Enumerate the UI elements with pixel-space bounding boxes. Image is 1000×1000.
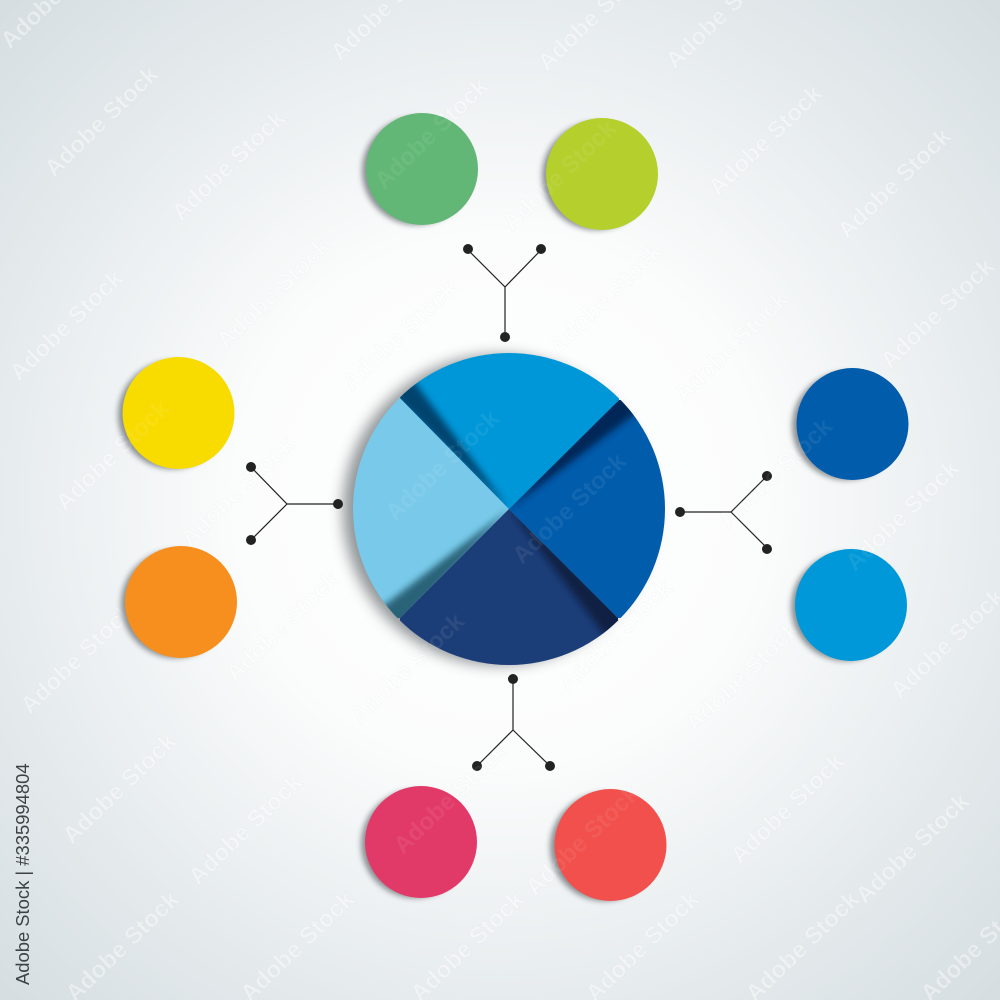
circle: green	[362, 113, 478, 225]
watermark over shapes: Adobe Stock	[369, 73, 494, 194]
fold shadow on right segment	[512, 400, 636, 508]
connector: top	[463, 244, 546, 342]
connector: bottom	[472, 674, 555, 771]
circle: lime	[542, 118, 658, 230]
watermark pattern: Adobe Stock	[220, 566, 345, 687]
connector: right	[675, 471, 772, 554]
watermark pattern: Adobe Stock	[680, 616, 805, 737]
watermark over shapes: Adobe Stock	[345, 608, 470, 729]
watermark over shapes: Adobe Stock	[507, 448, 632, 569]
fold shadow on bottom segment	[512, 514, 618, 636]
segment: right dark blue	[509, 400, 665, 618]
watermark pattern: Adobe Stock	[497, 115, 622, 236]
circle: sky blue	[791, 549, 907, 661]
circle: dark blue	[792, 368, 908, 480]
pie drop shadow	[343, 355, 653, 665]
watermark pattern: Adobe Stock	[337, 275, 462, 396]
watermark pattern: Adobe Stock	[543, 238, 668, 359]
circle: pink	[361, 786, 477, 898]
watermark pattern: Adobe Stock	[211, 233, 336, 354]
fold shadow on left segment	[383, 510, 506, 618]
watermark pattern: Adobe Stock	[39, 61, 164, 182]
watermark pattern: Adobe Stock	[388, 738, 513, 859]
watermark pattern: Adobe Stock	[725, 748, 850, 869]
watermark pattern: Adobe Stock	[175, 431, 300, 552]
segment: bottom navy	[400, 509, 618, 665]
watermark pattern: Adobe Stock	[669, 286, 794, 407]
circle: red	[550, 789, 666, 901]
watermark pattern: Adobe Stock	[713, 413, 838, 534]
watermark pattern: Adobe Stock	[840, 455, 965, 576]
connector: left	[246, 462, 343, 545]
watermark pattern: Adobe Stock	[703, 80, 828, 201]
watermark over shapes: Adobe Stock	[553, 575, 678, 696]
circle: yellow	[118, 357, 234, 469]
watermark over shapes: Adobe Stock	[388, 738, 513, 859]
watermark pattern: Adobe Stock	[183, 769, 308, 890]
segment: left light blue	[353, 398, 509, 618]
central pie circle	[340, 340, 680, 680]
circle: orange	[121, 546, 237, 658]
fold shadow on top segment	[400, 382, 508, 506]
watermark pattern: Adobe Stock	[57, 728, 182, 849]
watermark pattern: Adobe Stock	[875, 253, 1000, 374]
watermark over shapes: Adobe Stock	[520, 780, 645, 901]
watermark pattern: Adobe Stock	[166, 105, 291, 226]
watermark over shapes: Adobe Stock	[840, 455, 965, 576]
watermark over shapes: Adobe Stock	[380, 405, 505, 526]
watermark pattern: Adobe Stock	[850, 788, 975, 909]
watermark over shapes	[50, 73, 965, 901]
watermark over shapes: Adobe Stock	[497, 115, 622, 236]
watermark pattern: Adobe Stock	[4, 265, 129, 386]
watermark pattern: Adobe Stock	[520, 780, 645, 901]
watermark over shapes: Adobe Stock	[713, 413, 838, 534]
watermark pattern: Adobe Stock	[345, 608, 470, 729]
watermark pattern: Adobe Stock	[832, 123, 957, 244]
watermark over shapes: Adobe Stock	[50, 395, 175, 516]
segment: top blue	[400, 353, 619, 509]
watermark pattern: Adobe Stock	[15, 598, 140, 719]
watermark pattern: Adobe Stock	[553, 575, 678, 696]
watermark pattern: Adobe Stock	[369, 73, 494, 194]
watermark pattern: Adobe Stock	[50, 395, 175, 516]
stock id text: Adobe Stock | #335994804	[12, 763, 33, 985]
